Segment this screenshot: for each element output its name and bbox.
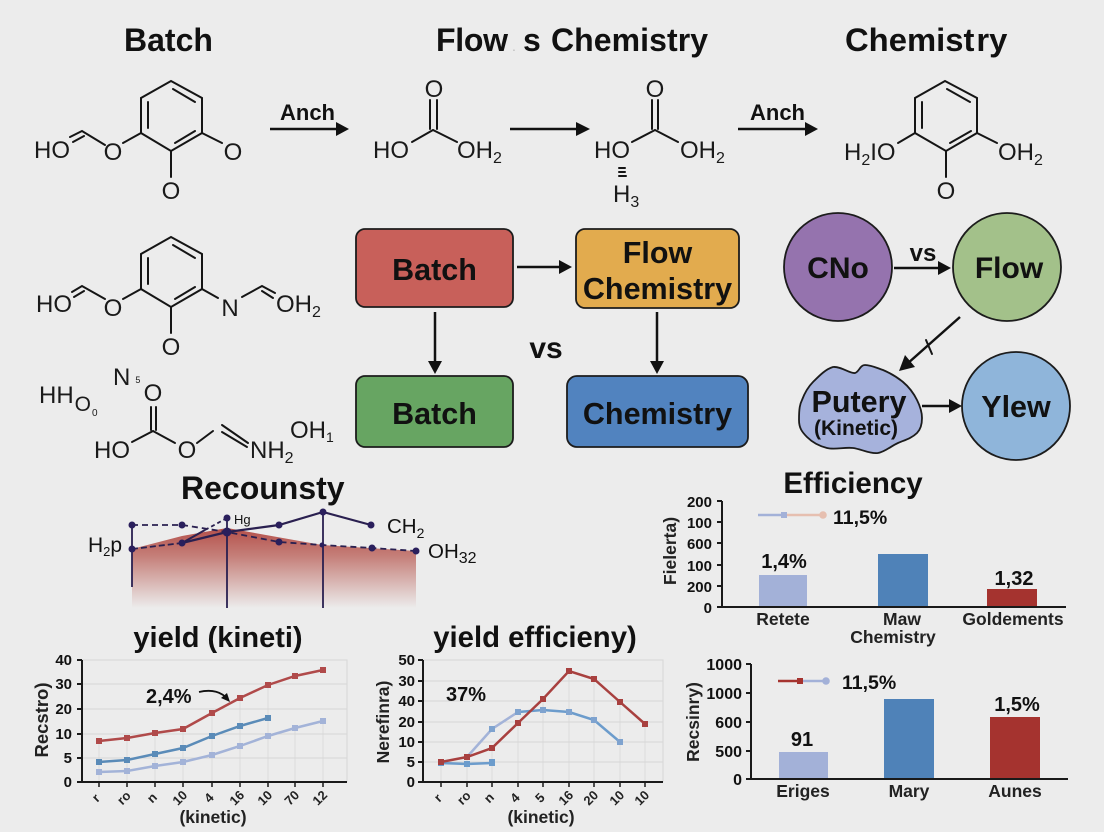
line chart: yield kinetic: 30 [55,676,72,693]
flow box: Flow Chemistry amber [576,229,739,308]
bar chart: Recsinry: Mary [889,781,930,801]
bar chart: Recsinry [683,657,1068,801]
line chart: yield kinetic: n [144,790,160,806]
heading: yield efficiency: yield efficieny) [433,621,637,654]
legend: 11,5% [842,672,896,694]
line chart: yield efficiency: 0 [407,774,415,791]
bar chart: Efficiency: 1,32 [995,568,1033,590]
molecule: top left ring: O [104,139,122,166]
title: Flow vs Chemistry: s [523,22,541,58]
bar chart: Recsinry: 1000 [706,657,742,674]
bar chart: Recsinry: 600 [715,715,742,732]
arrow: Flow down [650,312,664,374]
node: Ylew circle [962,352,1070,460]
line chart: yield kinetic: (kinetic) [179,807,247,827]
arrow: Anch top right: Anch [750,100,805,125]
molecule: carbonic acid two: HO [594,137,630,164]
molecule: lower left chain: O [144,380,162,407]
flow box: Chemistry blue: Chemistry [583,397,732,431]
line chart: yield efficiency [373,652,663,827]
molecule: middle left ring: N [221,295,239,322]
line chart: yield efficiency: 4 [507,789,523,806]
molecule: lower left chain: O [178,437,196,464]
molecule: carbonic acid two: 2 [716,150,725,167]
molecule: lower left chain: 2 [285,450,294,467]
line chart: yield efficiency: 10 [631,787,652,808]
flow box: Chemistry blue [567,376,748,447]
bar chart: Recsinry: Aunes [988,781,1042,801]
molecule: middle left ring: O [162,334,180,361]
line chart: yield kinetic: 10 [169,787,190,808]
chart: Recounsty area profile: 2 [103,544,110,559]
chart: Recounsty area profile: OH [428,540,459,563]
line chart: yield efficiency: (kinetic) [507,807,575,827]
arrow: Anch top right [738,100,818,136]
line chart: yield kinetic: 10 [55,726,72,743]
molecule: middle left ring: OH [276,291,312,318]
molecule: top right ring: O [937,178,955,205]
bar chart: Efficiency: 600 [687,536,712,553]
molecule: top right ring: H [844,139,861,166]
molecule: top right ring [844,81,1043,205]
molecule: carbonic acid one: 2 [493,150,502,167]
flow box: Batch red [356,229,513,307]
arrow: Anch top left [270,100,349,136]
bar chart: Efficiency: 100 [687,558,712,575]
series: light to blue arc [467,707,623,757]
molecule: lower left chain: HO [94,437,130,464]
line chart: yield kinetic: 40 [55,652,72,669]
legend: 11,5% [833,507,887,529]
node: Flow circle [953,213,1061,321]
legend [778,672,896,694]
title: Flow vs Chemistry: Chemistry [551,22,708,58]
legend [758,507,887,529]
molecule: carbonic acid two: 3 [630,194,639,211]
series: red [96,667,326,744]
molecule: top right ring: 2 [1034,152,1043,169]
series: flat blue [438,759,495,767]
line chart: yield efficiency: 20 [580,787,601,808]
molecule: carbonic acid two [594,76,725,211]
chart: Recounsty area profile: H [88,534,103,557]
bar chart: Recsinry: 500 [715,744,742,761]
arrow: CNo to Flow with vs: vs [910,240,936,267]
bar chart: Recsinry: 91 [791,729,813,751]
node: Putery blob: Putery [812,385,906,419]
molecule: top left ring [34,81,242,205]
bar chart: Efficiency: Fielerta) [660,517,680,585]
callout: 2,4% with curved arrow [146,686,230,708]
molecule: carbonic acid two: H [613,181,630,208]
flow box: Batch green [356,376,513,447]
bar chart: Efficiency: 200 [687,494,712,511]
line chart: yield efficiency: ro [454,788,474,808]
arrow: Batch to Flow [517,260,572,274]
line chart: yield efficiency: Nerefinra) [373,681,393,763]
chart: Recounsty area profile: 32 [459,550,477,567]
arrow: Flow to Putery [899,317,960,371]
molecule: lower left chain: 0 [92,408,98,419]
molecule: carbonic acid two: OH [680,137,716,164]
molecule: top left ring: O [224,139,242,166]
chart: Recounsty area profile: Hg [234,512,251,527]
molecule: middle left ring [36,237,321,361]
chart: Recounsty area profile [88,508,477,608]
molecule: lower left chain: NH [250,437,285,464]
chart: Recounsty area profile: 2 [417,525,425,541]
series: blue [96,715,271,765]
line chart: yield kinetic: r [89,791,103,805]
molecule: top left ring: HO [34,137,70,164]
bar chart: Recsinry: 0 [733,772,742,789]
line chart: yield efficiency: 16 [555,787,576,808]
line chart: yield efficiency: 5 [532,790,548,806]
flow box: Batch red: Batch [392,253,477,287]
bar chart: Recsinry: 1,5% [994,694,1040,716]
line chart: yield efficiency: 50 [398,652,415,669]
arrow: middle top [510,122,590,136]
chart: Recounsty area profile: CH [387,515,417,538]
line chart: yield efficiency: 10 [606,787,627,808]
molecule: carbonic acid one: OH [457,137,493,164]
bar chart: Efficiency: 1,4% [761,551,807,573]
molecule: lower left chain: 1 [326,429,334,445]
line chart: yield kinetic [31,652,347,827]
molecule: top right ring: IO [870,139,896,166]
line chart: yield efficiency: 10 [398,734,415,751]
flow box: Flow Chemistry amber: Chemistry [583,272,732,306]
line chart: yield kinetic: 10 [254,787,275,808]
node: CNo circle: CNo [807,252,869,285]
line chart: yield efficiency: 30 [398,673,415,690]
heading: Efficiency: Efficiency [783,467,923,500]
line chart: yield efficiency: 5 [407,754,415,771]
molecule: middle left ring: 2 [312,304,321,321]
label: vs centre: vs [529,332,563,365]
bar chart: Recsinry: Recsinry) [683,682,703,762]
line chart: yield kinetic: 70 [281,787,302,808]
node: Putery blob [799,365,922,453]
title: Flow vs Chemistry [436,22,708,58]
bar chart: Recsinry: Eriges [776,781,830,801]
bar chart: Efficiency: Retete [756,609,810,629]
flow box: Batch green: Batch [392,397,477,431]
molecule: carbonic acid two: O [646,76,664,103]
title: Batch: Batch [124,22,213,58]
line chart: yield kinetic: 4 [201,789,217,806]
molecule: lower left chain: OH [290,417,326,444]
molecule: lower left chain [39,364,334,467]
series: red [438,668,648,765]
molecule: lower left chain: HH [39,382,74,409]
bar chart: Recsinry: 1000 [706,686,742,703]
title: Flow vs Chemistry: . [512,38,516,54]
arrow: Anch top left: Anch [280,100,335,125]
bar chart: Efficiency: Maw [883,609,921,629]
bar chart: Efficiency: 0 [704,600,712,617]
line chart: yield kinetic: ro [114,788,134,808]
line chart: yield efficiency: n [481,790,497,806]
arrow: CNo to Flow with vs [894,240,951,275]
molecule: carbonic acid one [373,76,502,167]
line chart: yield efficiency: r [431,791,445,805]
line chart: yield kinetic: 5 [64,750,72,767]
series: light blue [96,718,326,775]
arrow: Putery to Ylew [922,399,962,413]
heading: yield kinetic: yield (kineti) [133,622,303,654]
node: Ylew circle: Ylew [981,390,1051,424]
line chart: yield kinetic: 16 [226,787,247,808]
line chart: yield efficiency: 20 [398,714,415,731]
line chart: yield kinetic: 12 [309,787,330,808]
bar chart: Efficiency: 200 [687,579,712,596]
molecule: carbonic acid one: O [425,76,443,103]
chart: Recounsty area profile: p [110,534,122,557]
bar chart: Efficiency: Goldements [962,609,1064,629]
flow box: Flow Chemistry amber: Flow [623,236,693,270]
molecule: lower left chain: N [113,364,130,391]
line chart: yield kinetic: Recstro) [31,682,52,758]
heading: Recounsty: Recounsty [181,470,345,506]
molecule: top right ring: 2 [861,152,870,169]
molecule: middle left ring: HO [36,291,72,318]
node: Flow circle: Flow [975,252,1044,285]
molecule: top left ring: O [162,178,180,205]
line chart: yield efficiency: 40 [398,693,415,710]
bar chart: Efficiency [660,494,1066,647]
title: Chemistry: Chemistry [845,21,1008,58]
molecule: carbonic acid one: HO [373,137,409,164]
molecule: top right ring: OH [998,139,1034,166]
bar chart: Efficiency: 100 [687,515,712,532]
molecule: middle left ring: O [104,295,122,322]
node: CNo circle [784,213,892,321]
line chart: yield kinetic: 20 [55,701,72,718]
line chart: yield efficiency: 37% [446,684,486,706]
molecule: lower left chain: 5 [135,375,140,385]
arrow: Batch down [428,312,442,374]
node: Putery blob: (Kinetic) [814,417,898,440]
title: Flow vs Chemistry: Flow [436,22,508,58]
line chart: yield kinetic: 0 [64,774,72,791]
callout: 2,4% with curved arrow: 2,4% [146,686,192,708]
bar chart: Efficiency: Chemistry [850,627,936,647]
molecule: lower left chain: O [75,393,91,416]
